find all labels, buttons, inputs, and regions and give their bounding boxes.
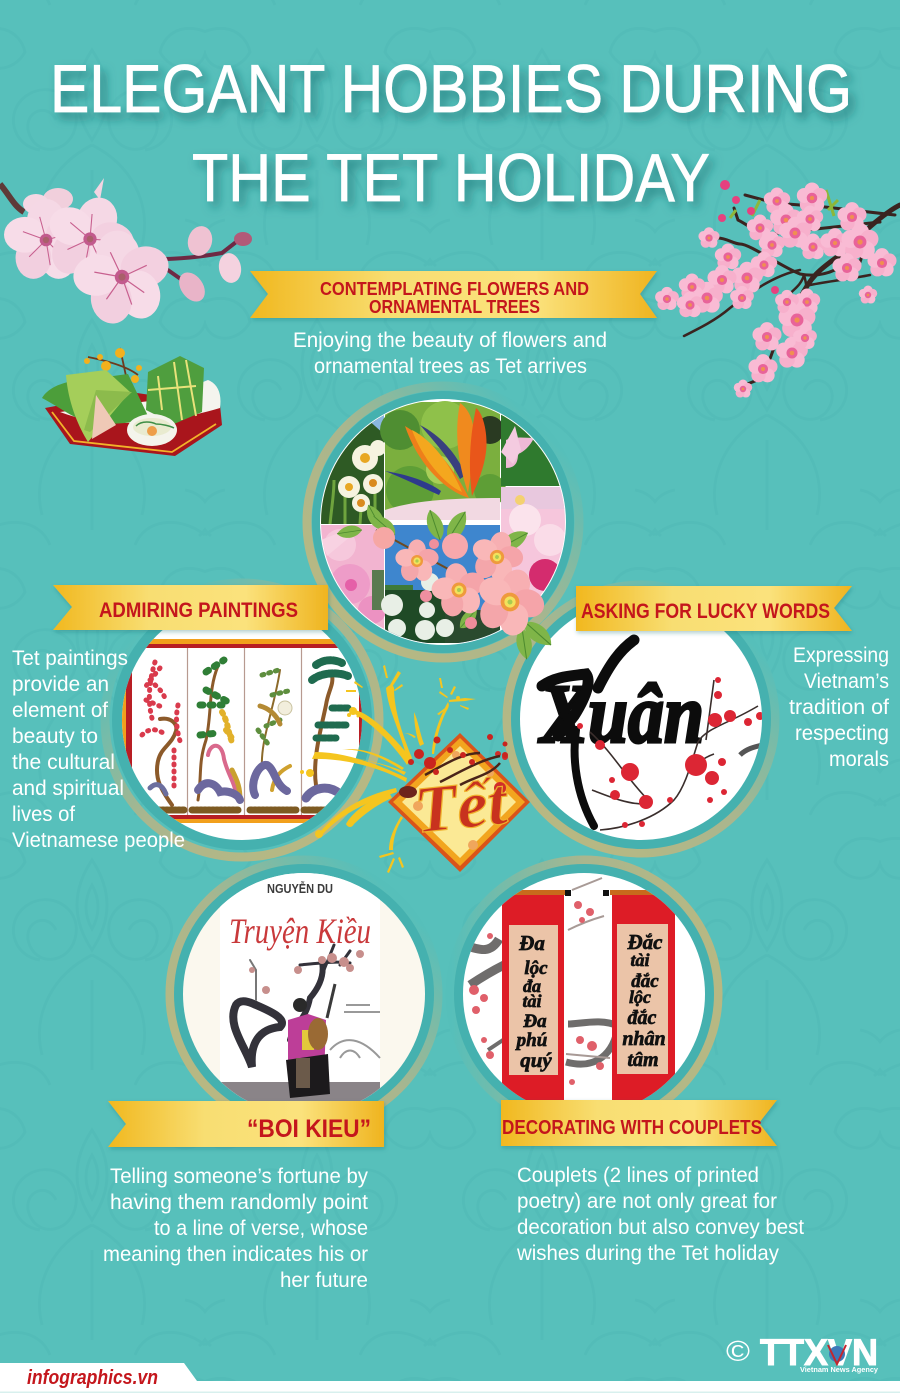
left red scroll: Đa (522, 1011, 547, 1032)
agency logo: © (726, 1336, 750, 1368)
circle: paintings (105, 583, 379, 857)
text: couplets: poetry) are not only great for (517, 1190, 777, 1213)
scroll 3 birds (250, 669, 296, 810)
ribbon: contemplating flowers: CONTEMPLATING FLOWERS AND (320, 279, 589, 299)
ink plum tree (233, 945, 350, 1067)
left red scroll: Đa (518, 931, 545, 955)
circle: calligraphy Xuan (507, 585, 775, 853)
agency logo: TTXVN (760, 1332, 878, 1373)
text: lucky words: Expressing (793, 644, 889, 667)
text: boi kieu (103, 1165, 368, 1292)
foreground pink peach flowers (337, 503, 554, 660)
photo: orchid on green (501, 414, 560, 486)
text: boi kieu: having them randomly point (110, 1191, 368, 1214)
pickle bowl (127, 414, 177, 446)
scroll 4 pine (304, 660, 348, 810)
photo: daffodils (321, 415, 385, 524)
ribbon: lucky words (576, 586, 852, 631)
illustration: banh chung tray (42, 348, 222, 456)
text: boi kieu: to a line of verse, whose (154, 1217, 368, 1240)
text: admiring paintings: lives of (12, 803, 75, 826)
photo: pink azalea (321, 525, 385, 629)
text: admiring paintings: beauty to (12, 725, 98, 748)
woman with lute (286, 984, 335, 1098)
illustration: peach blossom branch (0, 178, 252, 329)
title (50, 51, 852, 216)
triangular cake (42, 370, 148, 442)
text: contemplating flowers: Enjoying the beauty of flowers and (293, 329, 607, 352)
ribbon: admiring paintings (53, 585, 328, 630)
text: lucky words (789, 644, 889, 771)
ribbon: couplets: DECORATING WITH COUPLETS (502, 1117, 762, 1139)
left red scroll: đa (523, 976, 541, 996)
apricot twig (84, 348, 142, 383)
footer strip: infographics.vn (27, 1367, 158, 1389)
ribbon: contemplating flowers (250, 271, 657, 318)
text: admiring paintings: and spiritual (12, 777, 124, 800)
circle: flowers photo (307, 386, 579, 660)
text: admiring paintings: Tet paintings (12, 647, 128, 670)
ribbon: couplets (501, 1100, 777, 1146)
text: boi kieu: Telling someone’s fortune by (110, 1165, 368, 1188)
square cake (146, 356, 204, 424)
right red scroll: tài (630, 950, 650, 970)
left red scroll (502, 890, 571, 1105)
photo: sky and lily of the valley (381, 525, 500, 643)
left red scroll: phú (515, 1030, 547, 1051)
text: admiring paintings: the cultural (12, 751, 115, 774)
bridge and pavilion (330, 1005, 380, 1058)
text: lucky words: respecting (795, 722, 889, 745)
text: boi kieu: meaning then indicates his or (103, 1243, 368, 1266)
illustration: cherry blossom branch (655, 180, 900, 398)
text: admiring paintings (12, 647, 185, 852)
text: couplets: decoration but also convey best (517, 1216, 804, 1239)
left red scroll: quý (520, 1048, 552, 1072)
right red scroll: đắc (631, 971, 659, 992)
Tet lettering: Tết (411, 765, 512, 848)
scroll 2 peacock (192, 660, 240, 810)
text: contemplating flowers (293, 329, 607, 378)
brush strokes (542, 640, 634, 826)
ribbon: contemplating flowers: ORNAMENTAL TREES (369, 297, 540, 317)
small blossoms (413, 751, 494, 850)
right red scroll: Đắc (626, 930, 663, 954)
ribbon: boi kieu: “BOI KIEU” (247, 1115, 371, 1143)
photo: pink blossoms right (501, 487, 565, 596)
footer strip (0, 1363, 900, 1393)
ribbon: admiring paintings: ADMIRING PAINTINGS (99, 599, 298, 622)
book title script: Truyện Kiều (229, 911, 371, 951)
text: lucky words: morals (829, 748, 889, 771)
text: lucky words: tradition of (789, 696, 889, 719)
right red scroll: đắc (628, 1007, 657, 1029)
circle: book Truyen Kieu (170, 860, 438, 1128)
text: admiring paintings: provide an (12, 673, 109, 696)
right red scroll: tâm (627, 1049, 659, 1071)
right red scroll (603, 890, 680, 1105)
title: THE TET HOLIDAY (192, 140, 710, 216)
background ink plum branches (465, 878, 618, 1064)
left red scroll: tài (522, 991, 542, 1011)
text: admiring paintings: element of (12, 699, 108, 722)
text: couplets (516, 1164, 804, 1265)
agency logo: Vietnam News Agency (800, 1367, 878, 1374)
branch with red blossoms (425, 753, 500, 785)
photo: bird of paradise (380, 401, 506, 524)
calligraphy word: Xuân (537, 668, 704, 761)
book author: NGUYỄN DU (267, 881, 333, 896)
red plum branches (590, 680, 758, 830)
left red scroll: lộc (524, 958, 548, 979)
text: lucky words: Vietnam’s (804, 670, 889, 693)
text: contemplating flowers: ornamental trees as Tet arrives (314, 355, 587, 378)
fireworks: yellow streaks (300, 665, 476, 873)
text: boi kieu: her future (280, 1269, 368, 1292)
scroll 1 plum (142, 662, 186, 810)
text: couplets: Couplets (2 lines of printed (517, 1164, 759, 1187)
ribbon: boi kieu (108, 1101, 384, 1147)
tray (45, 392, 222, 456)
right red scroll: lộc (629, 987, 651, 1007)
text: couplets: wishes during the Tet holiday (516, 1242, 779, 1265)
text: admiring paintings: Vietnamese people (12, 829, 185, 852)
ground (221, 1082, 380, 1101)
circle: couplets (454, 856, 722, 1104)
ribbon: lucky words: ASKING FOR LUCKY WORDS (581, 600, 830, 623)
right red scroll: nhân (622, 1028, 666, 1050)
frame (149, 639, 335, 644)
Tet ornament (388, 733, 530, 872)
